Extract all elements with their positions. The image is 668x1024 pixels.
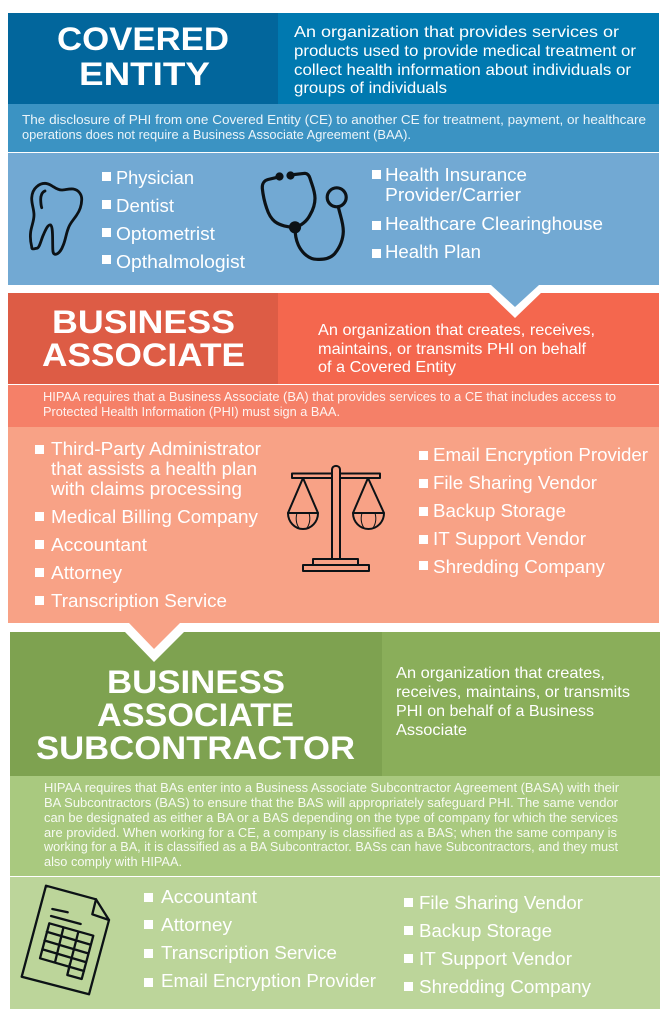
header background light xyxy=(382,632,660,776)
note text: can be designated as either a BA or a BAS depending on the type of company for which the services xyxy=(44,811,618,825)
title: covered entity: COVERED xyxy=(57,21,229,57)
section: covered entity xyxy=(8,13,659,285)
title: business associate subcontractor: SUBCONTRACTOR xyxy=(36,730,355,766)
definition text: collect health information about individuals or xyxy=(294,62,632,79)
list: shared vendors left: Email Encryption Provider xyxy=(161,971,376,991)
note text: also comply with HIPAA. xyxy=(44,855,182,869)
definition text: An organization that creates, xyxy=(396,665,605,682)
list: vendors: File Sharing Vendor xyxy=(433,473,597,493)
definition text: of a Covered Entity xyxy=(318,359,456,376)
list: service providers xyxy=(35,439,261,611)
section: business associate xyxy=(8,285,659,623)
note text: operations does not require a Business Associate Agreement (BAA). xyxy=(22,128,411,142)
list: service providers: Transcription Service xyxy=(51,591,227,611)
section: business associate subcontractor xyxy=(10,623,660,1009)
note text: The disclosure of PHI from one Covered Entity (CE) to another CE for treatment, payment, or healthcare xyxy=(22,113,646,127)
arrow: chevron from covered entity xyxy=(488,285,542,318)
list: providers xyxy=(102,168,245,272)
list: vendors: IT Support Vendor xyxy=(433,529,586,549)
list: providers: Optometrist xyxy=(116,224,215,244)
definition text: maintains, or transmits PHI on behalf xyxy=(318,341,587,358)
definition text: groups of individuals xyxy=(294,80,447,97)
list: shared vendors left xyxy=(144,887,376,991)
note text: HIPAA requires that BAs enter into a Business Associate Subcontractor Agreement (BASA) with their xyxy=(44,781,619,795)
note text xyxy=(22,113,646,142)
definition text: An organization that creates, receives, xyxy=(318,322,595,339)
note band background xyxy=(8,104,659,152)
icon: document with table xyxy=(22,886,109,994)
header background dark xyxy=(8,13,278,104)
definition text: receives, maintains, or transmits xyxy=(396,684,630,701)
icon: stethoscope xyxy=(262,173,346,259)
definition text: products used to provide medical treatment or xyxy=(294,43,637,60)
header background dark xyxy=(10,632,382,776)
list: service providers: Accountant xyxy=(51,535,147,555)
list: service providers: that assists a health plan xyxy=(51,459,257,479)
list: shared vendors right: Shredding Company xyxy=(419,977,591,997)
header background dark xyxy=(8,293,278,384)
note text: BA Subcontractors (BAS) to ensure that the BAS will appropriately safeguard PHI. The same vendor xyxy=(44,796,618,810)
list: payers: Provider/Carrier xyxy=(385,185,521,205)
list: shared vendors right: IT Support Vendor xyxy=(419,949,572,969)
title: business associate subcontractor: BUSINESS xyxy=(107,664,285,700)
list: providers: Opthalmologist xyxy=(116,252,245,272)
list panel background xyxy=(8,427,659,623)
title: covered entity xyxy=(57,21,229,92)
list: shared vendors right: File Sharing Vendor xyxy=(419,893,583,913)
list: shared vendors left: Transcription Service xyxy=(161,943,337,963)
definition text xyxy=(318,322,595,376)
header background light xyxy=(278,13,659,104)
list: payers: Health Insurance xyxy=(385,165,527,185)
definition text: An organization that provides services or xyxy=(294,24,620,41)
icon: tooth xyxy=(30,183,82,254)
definition text: Associate xyxy=(396,722,467,739)
title: business associate subcontractor: ASSOCIATE xyxy=(97,697,294,733)
list: vendors: Email Encryption Provider xyxy=(433,445,648,465)
note band background xyxy=(8,385,659,427)
list: shared vendors right xyxy=(404,893,591,997)
definition text xyxy=(294,24,637,97)
title: business associate: BUSINESS xyxy=(52,304,235,340)
note text: working for a BA, it is classified as a BA Subcontractor. BASs can have Subcontractors, and they must xyxy=(43,840,619,854)
note text: Protected Health Information (PHI) must sign a BAA. xyxy=(43,405,340,419)
list: payers xyxy=(372,165,603,262)
header background light xyxy=(278,293,659,384)
arrow: chevron from business associate xyxy=(125,623,184,662)
list: shared vendors right: Backup Storage xyxy=(419,921,552,941)
list panel background xyxy=(10,877,660,1009)
note text: are provided. When working for a CE, a company is classified as a BAS; when the same company is xyxy=(44,826,617,840)
list: payers: Health Plan xyxy=(385,242,481,262)
note band background xyxy=(10,776,660,876)
icon: scales of justice xyxy=(288,466,384,571)
title: business associate: ASSOCIATE xyxy=(42,337,245,373)
note text xyxy=(43,781,619,869)
list: service providers: with claims processing xyxy=(50,479,242,499)
list: service providers: Third-Party Administrator xyxy=(51,439,261,459)
definition text: PHI on behalf of a Business xyxy=(396,703,594,720)
list: providers: Physician xyxy=(116,168,194,188)
title: business associate xyxy=(42,304,245,373)
list: providers: Dentist xyxy=(116,196,174,216)
list: vendors: Shredding Company xyxy=(433,557,605,577)
note text: HIPAA requires that a Business Associate (BA) that provides services to a CE that includes access to xyxy=(43,390,616,404)
list panel background xyxy=(8,153,659,285)
title: covered entity: ENTITY xyxy=(79,56,210,92)
list: service providers: Attorney xyxy=(51,563,122,583)
list: vendors: Backup Storage xyxy=(433,501,566,521)
note text xyxy=(43,390,616,419)
list: shared vendors left: Attorney xyxy=(161,915,232,935)
list: vendors xyxy=(419,445,648,577)
list: shared vendors left: Accountant xyxy=(161,887,257,907)
list: payers: Healthcare Clearinghouse xyxy=(385,214,603,234)
title: business associate subcontractor xyxy=(36,664,355,766)
definition text xyxy=(396,665,630,739)
list: service providers: Medical Billing Company xyxy=(51,507,258,527)
